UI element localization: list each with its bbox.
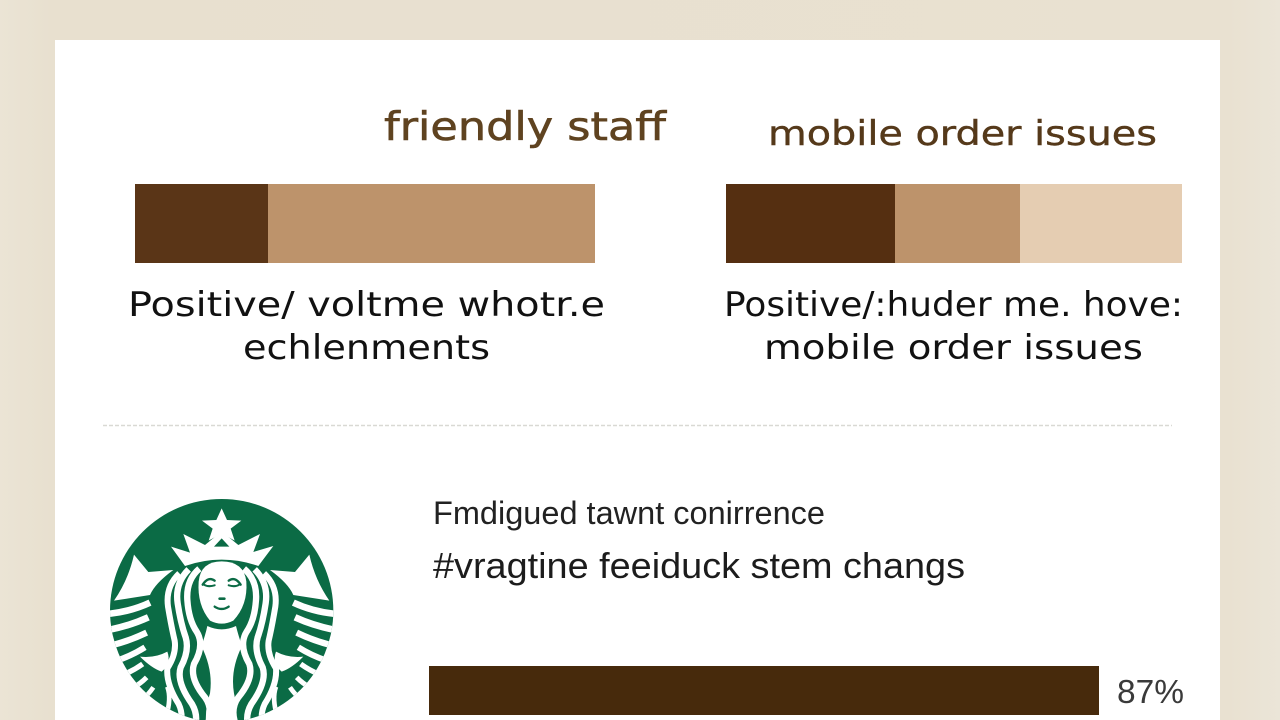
- icon part: crown gem: [214, 538, 229, 547]
- caption: friendly staff: echlenments: [243, 328, 490, 368]
- stacked bar: friendly staff: [135, 184, 595, 263]
- icon part: right tail: [233, 555, 337, 720]
- caption: mobile order issues: [724, 285, 1183, 368]
- stacked bar: mobile order issues: [726, 184, 1182, 263]
- caption: friendly staff: [128, 285, 605, 368]
- heading: friendly staff: friendly staff: [384, 105, 667, 150]
- icon: Starbucks siren logo: [107, 499, 337, 720]
- text line: bottom: #vragtine feeiduck stem changs: [433, 545, 965, 586]
- caption: friendly staff: Positive/ voltme whotr.e: [128, 285, 605, 325]
- text line: top: Fmdigued tawnt conirrence: [433, 495, 825, 531]
- icon part: crown: [171, 531, 273, 566]
- icon part: face features: [203, 579, 241, 609]
- heading: mobile order issues: mobile order issues: [768, 114, 1157, 154]
- caption: mobile order issues: Positive/:huder me. hove:: [724, 285, 1183, 325]
- bar: percentage: [429, 666, 1099, 715]
- value label: 87%: [1117, 673, 1184, 710]
- icon part: star: [202, 508, 241, 541]
- icon part: torso: [201, 626, 242, 720]
- icon part: left tail: [107, 555, 210, 720]
- icon part: face: [198, 561, 247, 624]
- caption: mobile order issues: mobile order issues: [764, 328, 1143, 368]
